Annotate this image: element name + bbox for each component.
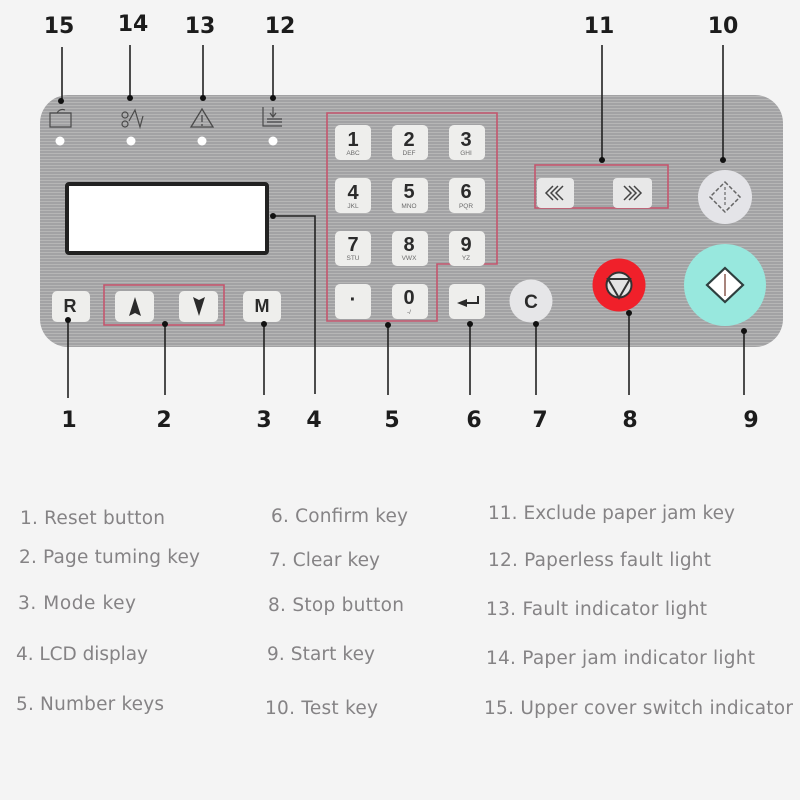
legend column 2: 9. Start key [267,644,375,665]
up key [115,291,154,322]
icon: upper cover [50,109,71,127]
start button [684,244,766,326]
legend column 3 [484,503,793,719]
reset key [52,291,90,322]
number keys: 5 [403,181,415,203]
reset key: R [64,296,76,316]
legend column 3: 15. Upper cover switch indicator [484,698,793,719]
legend column 3: 12. Paperless fault light [488,550,711,571]
legend column 3: 11. Exclude paper jam key [488,503,735,524]
down key [179,291,218,322]
icon: paperless [263,107,282,126]
legend column 3: 14. Paper jam indicator light [486,648,755,669]
legend column 2 [265,506,408,719]
callout numbers: 4 [306,408,322,433]
callout numbers: 9 [743,408,759,433]
number keys: 4 [347,182,359,204]
test key [698,170,752,224]
icon: paper jam [122,110,143,127]
legend column 1: 4. LCD display [16,644,148,665]
callout numbers: 3 [256,408,272,433]
callout numbers: 12 [265,14,295,39]
callout numbers: 11 [584,14,614,39]
paper jam keys box [535,165,668,208]
number keys: 9 [460,234,472,256]
number keys [335,125,485,319]
number keys: STU [346,255,360,262]
number keys: MNO [401,203,417,210]
legend column 1: 1. Reset button [20,508,165,529]
callout numbers: 10 [708,14,738,39]
callout numbers: 13 [185,14,215,39]
number keys: 3 [460,129,472,151]
rewind key [537,178,574,208]
number keys: 8 [403,234,415,256]
number keys: 2 [403,129,415,151]
number keys: · [350,289,356,311]
indicator lights [56,136,278,146]
legend column 2: 10. Test key [265,698,378,719]
callout numbers: 1 [61,408,77,433]
clear key [510,280,552,322]
legend column 3: 13. Fault indicator light [486,599,707,620]
leader lines [62,45,744,398]
legend column 2: 7. Clear key [269,550,380,571]
number keys: 0 [403,287,415,309]
number keys: 7 [347,234,359,256]
number keys: JKL [347,203,359,210]
callout numbers [44,12,759,433]
number keys: YZ [462,255,470,262]
number keys box [327,113,497,321]
callout numbers: 8 [622,408,638,433]
legend column 1: 5. Number keys [16,694,164,715]
callout numbers: 2 [156,408,172,433]
number keys: ABC [346,150,360,157]
LCD display [67,184,267,253]
number keys: VWX [402,255,417,262]
forward key [613,178,652,208]
legend column 2: 8. Stop button [268,595,404,616]
number keys: DEF [402,150,416,157]
legend column 1: 2. Page tuming key [19,547,200,568]
callout numbers: 5 [384,408,400,433]
callout numbers: 14 [118,12,148,37]
callout numbers: 6 [466,408,482,433]
leader dots [58,95,747,334]
confirm key [449,284,485,319]
legend column 1: 3. Mode key [18,593,136,614]
number keys: 6 [460,181,472,203]
legend column 2: 6. Confirm key [271,506,408,527]
number keys: PQR [459,203,473,210]
page turning box [104,285,224,325]
callout numbers: 15 [44,14,74,39]
clear key: C [524,292,538,313]
icon: fault triangle [191,109,213,127]
stop button [592,258,646,312]
mode key: M [254,296,270,316]
mode key [243,291,281,322]
number keys: -/ [407,309,411,316]
callout numbers: 7 [532,408,548,433]
number keys: 1 [347,129,359,151]
control panel [40,95,783,347]
legend column 1 [16,508,200,715]
number keys: GHI [460,150,472,157]
